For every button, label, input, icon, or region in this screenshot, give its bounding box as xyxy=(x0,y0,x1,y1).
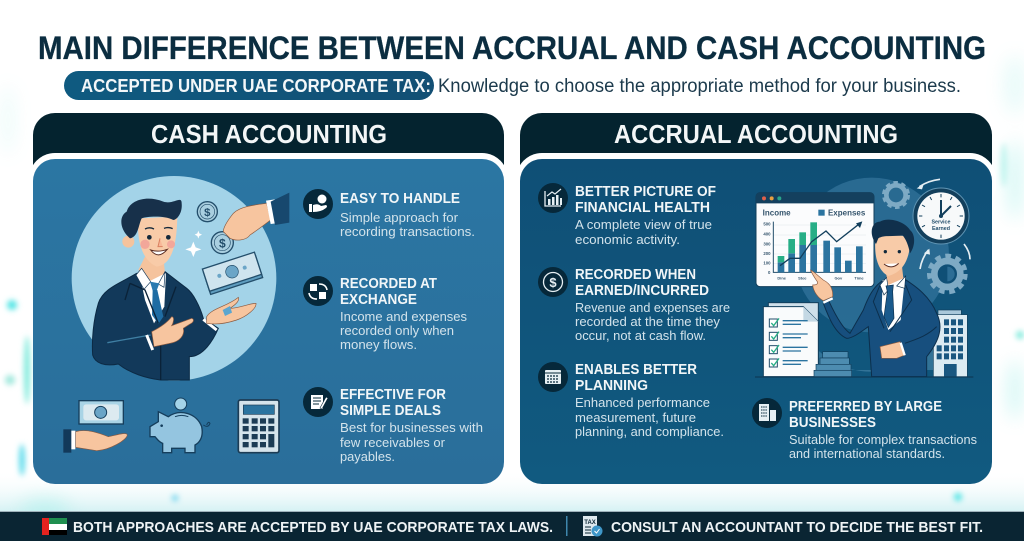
coin xyxy=(197,202,217,222)
chart window: Expenses xyxy=(828,208,866,217)
gear large xyxy=(929,256,965,292)
icon: office buildings xyxy=(752,398,782,428)
businessman xyxy=(811,220,940,377)
item: recorded when earned/incurred xyxy=(538,267,730,343)
icon: dollar cycle: $ xyxy=(549,275,557,290)
item: effective for simple deals: few receivables or xyxy=(340,436,445,450)
footer message 1: BOTH APPROACHES ARE ACCEPTED BY UAE CORPORATE TAX LAWS. xyxy=(73,519,553,536)
item: recorded when earned/incurred: Revenue and expenses are xyxy=(575,301,730,315)
chart window: 500 xyxy=(763,222,771,227)
item: recorded at exchange xyxy=(303,276,467,352)
item: effective for simple deals xyxy=(303,387,483,464)
item: recorded when earned/incurred: recorded at the time they xyxy=(575,315,721,329)
item: effective for simple deals: Best for businesses with xyxy=(340,421,483,435)
icon: banknote over hand xyxy=(63,401,127,453)
icon: piggy bank xyxy=(150,398,210,453)
item: better picture of financial health: FINANCIAL HEALTH xyxy=(575,200,710,216)
icon: dollar cycle xyxy=(538,267,568,297)
document with checklist xyxy=(763,303,818,377)
coin in hand: $ xyxy=(219,236,226,250)
chart window: Time xyxy=(854,276,864,281)
accrual header: ACCRUAL ACCOUNTING xyxy=(614,121,898,149)
icon: exchange arrows xyxy=(303,276,333,306)
subtitle pill xyxy=(64,71,434,100)
coin: $ xyxy=(204,207,211,219)
item: easy to handle: recording transactions. xyxy=(340,225,475,239)
item: easy to handle xyxy=(303,189,475,239)
icon: growth chart xyxy=(538,183,568,213)
chart window: 0 xyxy=(768,270,771,275)
icon: tax document: TAX xyxy=(584,520,596,526)
chart window: Gov xyxy=(834,276,843,281)
footer bar xyxy=(0,511,1024,541)
chart window xyxy=(756,193,874,287)
chart window: Dine xyxy=(777,276,787,281)
chart window: 200 xyxy=(763,251,771,256)
chart window: 100 xyxy=(763,261,771,266)
icon: notepad and pen xyxy=(303,387,333,417)
item: enables better planning: PLANNING xyxy=(575,378,648,394)
item: easy to handle: EASY TO HANDLE xyxy=(340,191,460,207)
clock: Earned xyxy=(932,226,950,232)
item: effective for simple deals: EFFECTIVE FOR xyxy=(340,387,446,403)
item: preferred by large businesses: PREFERRED BY LARGE xyxy=(789,399,942,415)
item: preferred by large businesses: BUSINESSES xyxy=(789,415,876,431)
item: enables better planning: planning, and compliance. xyxy=(575,425,724,439)
item: recorded at exchange: EXCHANGE xyxy=(340,292,417,308)
paper stack xyxy=(814,352,852,377)
item: recorded when earned/incurred: occur, not at cash flow. xyxy=(575,329,706,343)
subtitle xyxy=(64,71,961,100)
clock: Service xyxy=(932,220,951,226)
illustration: businessman receiving cash xyxy=(72,176,289,381)
item: better picture of financial health: A complete view of true xyxy=(575,218,712,232)
chart window: Stee xyxy=(798,276,807,281)
footer message 2: CONSULT AN ACCOUNTANT TO DECIDE THE BEST FIT. xyxy=(611,519,983,536)
cash panel body xyxy=(33,159,504,484)
icon: calendar xyxy=(538,362,568,392)
item: enables better planning xyxy=(538,362,724,439)
cash header: CASH ACCOUNTING xyxy=(151,121,387,149)
chart window: Income xyxy=(763,208,791,217)
item: preferred by large businesses: and international standards. xyxy=(789,447,945,461)
subtitle text: Knowledge to choose the appropriate method for your business. xyxy=(438,76,961,97)
item: effective for simple deals: SIMPLE DEALS xyxy=(340,403,441,419)
item: better picture of financial health: BETTER PICTURE OF xyxy=(575,184,716,200)
item: recorded at exchange: recorded only when xyxy=(340,324,454,338)
item: preferred by large businesses xyxy=(752,398,977,461)
item: enables better planning: measurement, future xyxy=(575,411,696,425)
item: better picture of financial health xyxy=(538,183,716,247)
item: recorded at exchange: money flows. xyxy=(340,338,417,352)
item: enables better planning: Enhanced performance xyxy=(575,396,710,410)
illustration: businessman with chart xyxy=(755,178,973,377)
item: preferred by large businesses: Suitable for complex transactions xyxy=(789,433,977,447)
clock xyxy=(913,188,969,244)
panel: accrual accounting xyxy=(516,113,996,484)
gear xyxy=(884,183,908,207)
item: enables better planning: ENABLES BETTER xyxy=(575,362,697,378)
icon: tax document xyxy=(583,516,602,536)
item: recorded when earned/incurred: EARNED/INCURRED xyxy=(575,283,709,299)
item: recorded at exchange: RECORDED AT xyxy=(340,276,437,292)
coin in hand xyxy=(211,232,233,254)
icon: hand with coin xyxy=(303,189,333,219)
item: easy to handle: Simple approach for xyxy=(340,211,458,225)
arrows xyxy=(917,179,970,269)
item: effective for simple deals: payables. xyxy=(340,450,395,464)
chart window: 400 xyxy=(763,231,771,236)
cash header xyxy=(33,113,504,172)
pill label: ACCEPTED UNDER UAE CORPORATE TAX: xyxy=(81,75,431,96)
chart window: 300 xyxy=(763,241,771,246)
icon: UAE flag xyxy=(42,518,67,535)
item: recorded when earned/incurred: RECORDED WHEN xyxy=(575,267,696,283)
icon: calculator xyxy=(238,400,279,453)
building xyxy=(933,310,967,377)
accrual header xyxy=(520,113,992,172)
accrual panel body xyxy=(520,159,992,484)
panel: cash accounting xyxy=(29,113,508,484)
banknotes xyxy=(202,252,263,294)
item: better picture of financial health: economic activity. xyxy=(575,233,680,247)
item: recorded at exchange: Income and expenses xyxy=(340,310,467,324)
